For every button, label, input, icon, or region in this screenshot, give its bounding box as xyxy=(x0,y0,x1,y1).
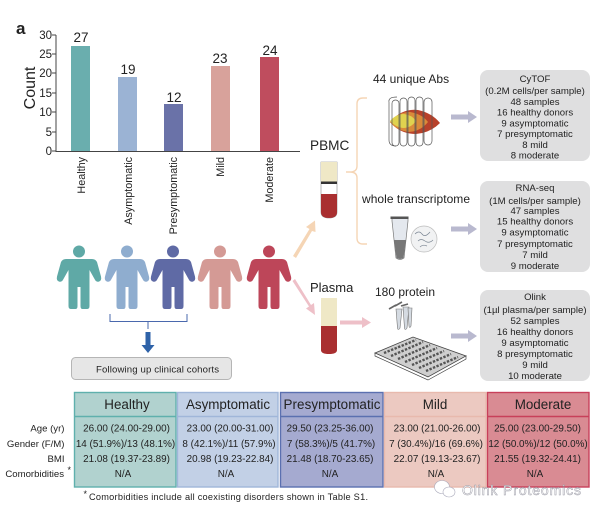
table column: asymptomatic: 23.00 (20.00-31.00) xyxy=(187,424,273,434)
panel: RNA-seq: 7 presymptomatic xyxy=(497,239,573,250)
table column: asymptomatic: 8 (42.1%)/11 (57.9%) xyxy=(182,439,276,450)
panel: Olink: 9 asymptomatic xyxy=(501,338,569,349)
table column: mild: Mild xyxy=(423,397,447,412)
table column: presymptomatic: Presymptomatic xyxy=(284,397,381,412)
arrow: to PBMC xyxy=(293,220,316,258)
footnote: Comorbidities include all coexisting disorders shown in Table S1. xyxy=(89,492,368,502)
panel: RNA-seq: 9 asymptomatic xyxy=(501,228,569,238)
label: 180 protein: 180 protein xyxy=(375,285,435,299)
arrow: to plasma xyxy=(292,279,315,315)
table column: healthy xyxy=(74,392,176,487)
y axis xyxy=(52,35,300,152)
arrow: Olink xyxy=(451,330,477,342)
icon: well plate xyxy=(375,337,466,380)
y axis title: Count xyxy=(22,66,39,109)
watermark text: Olink Proteomics xyxy=(462,482,581,498)
bar chart: count per group xyxy=(22,30,300,234)
table row labels: * xyxy=(68,465,72,475)
panel: RNA-seq: (1M cells/per sample) xyxy=(489,196,581,207)
bar values: 24 xyxy=(262,43,278,58)
table column: asymptomatic: Asymptomatic xyxy=(186,397,270,412)
table column: moderate: N/A xyxy=(527,469,544,480)
arrow: RNA-seq xyxy=(451,223,477,235)
icon: person healthy xyxy=(57,246,101,309)
arrow: plasma to protein xyxy=(340,317,371,328)
icon: RNA tube and transcript bubble xyxy=(390,216,437,260)
panel letter: a xyxy=(16,19,26,38)
panel: RNA-seq: 9 moderate xyxy=(511,261,559,272)
bar values: 12 xyxy=(166,90,182,105)
watermark icon xyxy=(434,480,455,497)
bar values: 23 xyxy=(212,51,228,66)
panel: RNA-seq: 15 healthy donors xyxy=(497,216,573,228)
table column: moderate: 25.00 (23.00-29.50) xyxy=(494,424,581,434)
table column: asymptomatic xyxy=(178,392,278,487)
bar: mild xyxy=(211,66,230,151)
table row labels: Age (yr) xyxy=(30,424,64,434)
bar values xyxy=(73,30,278,105)
table column: mild: 23.00 (21.00-26.00) xyxy=(394,424,480,434)
footnote: * xyxy=(84,489,88,499)
panel: CyTOF: (0.2M cells/per sample) xyxy=(485,86,585,97)
arrow: CyTOF xyxy=(451,111,477,123)
table column: mild: N/A xyxy=(428,469,445,480)
panel: CyTOF: 16 healthy donors xyxy=(497,108,573,118)
table row labels: Comorbidities xyxy=(5,469,64,480)
panel: Olink: (1µl plasma/per sample) xyxy=(483,305,587,316)
panel: CyTOF xyxy=(480,70,590,162)
y axis tick labels: 15 xyxy=(39,88,52,100)
panel: Olink: 52 samples xyxy=(510,316,560,327)
table column: mild xyxy=(384,392,486,487)
panel: CyTOF: CyTOF xyxy=(520,74,550,85)
bar: asymptomatic xyxy=(118,77,137,151)
table row labels xyxy=(5,424,72,480)
bar: moderate xyxy=(260,57,279,151)
table column: moderate: 21.55 (19.32-24.41) xyxy=(494,454,581,465)
panel: RNA-seq: 47 samples xyxy=(510,206,560,217)
icon: sample tubes xyxy=(389,302,412,330)
panel: RNA-seq: 7 mild xyxy=(522,250,548,261)
panel: CyTOF: 48 samples xyxy=(510,97,560,108)
x axis labels xyxy=(76,156,276,234)
bar values: 19 xyxy=(120,62,136,77)
label: antibodies: 44 unique Abs xyxy=(373,72,449,86)
panel: Olink: 10 moderate xyxy=(508,371,562,382)
icon: person presymptomatic xyxy=(151,246,195,309)
panel: RNA-seq xyxy=(480,181,590,272)
table column: moderate: Moderate xyxy=(515,397,571,412)
table column: moderate: 12 (50.0%)/12 (50.0%) xyxy=(488,439,588,450)
icon: plasma tube xyxy=(321,298,337,354)
table column: mild: 22.07 (19.13-23.67) xyxy=(394,454,480,465)
table column: presymptomatic: 29.50 (23.25-36.00) xyxy=(287,424,373,434)
y axis tick labels: 30 xyxy=(39,30,52,42)
panel: CyTOF: 8 moderate xyxy=(511,150,559,162)
panel: Olink: 8 presymptomatic xyxy=(497,349,573,360)
x axis labels: Presymptomatic xyxy=(168,156,180,234)
icon: PBMC tube xyxy=(321,162,337,218)
panel: CyTOF: 8 mild xyxy=(522,140,548,151)
label: PBMC: PBMC xyxy=(310,138,349,153)
panel: CyTOF: 7 presymptomatic xyxy=(497,129,573,140)
panel: Olink: 9 mild xyxy=(522,360,548,371)
table column: presymptomatic: 21.48 (18.70-23.65) xyxy=(287,454,373,465)
arrow: to clinical cohorts xyxy=(142,332,154,353)
x axis labels: Moderate xyxy=(264,157,276,203)
brace: PBMC branches xyxy=(346,98,367,244)
panel: Olink xyxy=(480,290,590,382)
y axis tick labels: 5 xyxy=(46,127,52,139)
table column: healthy: Healthy xyxy=(104,397,150,412)
table column: healthy: 14 (51.9%)/13 (48.1%) xyxy=(76,439,175,450)
table column: healthy: N/A xyxy=(115,469,132,480)
icon: person moderate xyxy=(247,246,291,309)
table column: asymptomatic: 20.98 (19.23-22.84) xyxy=(187,454,273,465)
panel: RNA-seq: RNA-seq xyxy=(516,183,554,194)
icon: CyTOF coil and cell xyxy=(389,97,440,146)
table column: asymptomatic: N/A xyxy=(218,469,235,480)
cohort bracket xyxy=(110,314,187,329)
y axis tick labels: 25 xyxy=(39,49,52,61)
table row labels: Gender (F/M) xyxy=(7,439,64,450)
x axis labels: Healthy xyxy=(76,156,88,194)
icon: person mild xyxy=(198,246,242,309)
table column: healthy: 26.00 (24.00-29.00) xyxy=(83,424,170,434)
table column: presymptomatic: 7 (58.3%)/5 (41.7%) xyxy=(287,439,375,450)
panel: CyTOF: 9 asymptomatic xyxy=(501,118,569,130)
x axis labels: Asymptomatic xyxy=(123,156,135,225)
table column: presymptomatic: N/A xyxy=(322,469,339,480)
y axis tick labels xyxy=(39,30,52,158)
callout: following up clinical cohorts xyxy=(72,358,232,380)
table column: mild: 7 (30.4%)/16 (69.6%) xyxy=(389,439,483,450)
y axis tick labels: 0 xyxy=(46,146,52,158)
label: plasma: Plasma xyxy=(310,280,354,295)
y axis tick labels: 10 xyxy=(39,107,52,119)
label: whole transcriptome: whole transcriptome xyxy=(361,192,470,206)
callout: following up clinical cohorts: Following up clinical cohorts xyxy=(96,364,219,376)
bar: healthy xyxy=(71,46,90,151)
table row labels: BMI xyxy=(47,454,64,465)
table column: healthy: 21.08 (19.37-23.89) xyxy=(83,454,170,465)
y axis tick labels: 20 xyxy=(39,68,52,80)
icon: person asymptomatic xyxy=(105,246,149,309)
bar: presymptomatic xyxy=(164,104,183,151)
table column: presymptomatic xyxy=(280,392,383,487)
panel: Olink: Olink xyxy=(524,292,546,303)
panel: Olink: 16 healthy donors xyxy=(497,327,573,338)
bar values: 27 xyxy=(73,30,89,45)
table column: moderate xyxy=(488,392,589,487)
x axis labels: Mild xyxy=(215,157,227,177)
